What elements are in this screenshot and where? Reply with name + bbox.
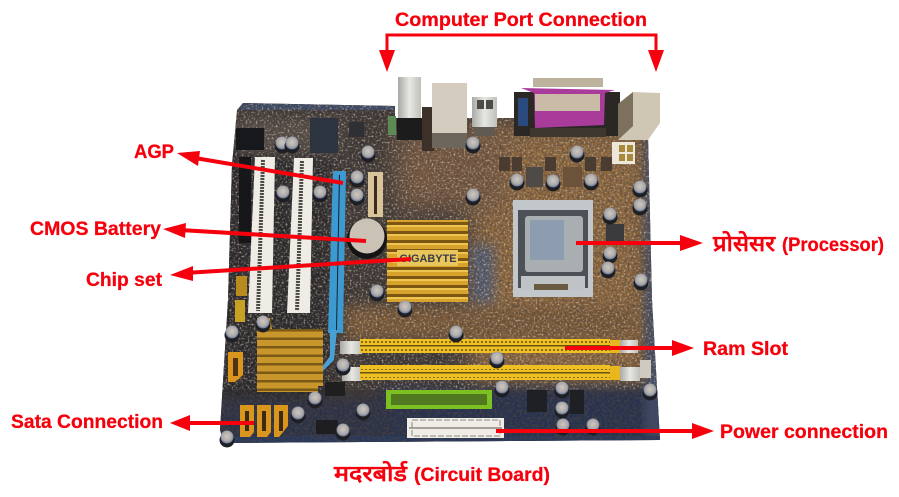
title: computer port connection: Computer Port Connection	[395, 10, 647, 31]
label: CMOS Battery: CMOS Battery	[30, 219, 161, 240]
motherboard photo	[215, 77, 665, 448]
caption: circuit board	[333, 460, 550, 486]
arrow: power connection	[496, 423, 714, 439]
chipset heatsink	[387, 220, 468, 302]
label: processor	[712, 230, 884, 256]
label: RAM slot: Ram Slot	[703, 339, 789, 360]
4-pin connector	[612, 142, 635, 164]
PCI slot 2	[287, 158, 313, 313]
ethernet port	[432, 83, 467, 148]
I/O ports	[388, 77, 660, 164]
IDE header	[239, 157, 251, 243]
lower heatsink	[257, 318, 323, 392]
label: AGP: AGP	[134, 142, 174, 163]
label: power connection: Power connection	[720, 422, 888, 443]
CPU socket and processor	[513, 200, 593, 297]
RAM slot 1	[340, 339, 638, 354]
small PCIe slot	[368, 172, 383, 217]
yellow pin headers	[235, 276, 247, 322]
fan header	[236, 128, 264, 150]
USB port	[472, 97, 497, 136]
CMOS battery	[347, 218, 387, 259]
AGP slot	[320, 171, 346, 372]
label: chip set: Chip set	[86, 270, 163, 291]
ATX power connector	[407, 418, 504, 438]
bracket arrow: computer ports	[379, 35, 664, 72]
PCI slot 1	[248, 157, 275, 313]
arrow: CMOS battery	[163, 223, 366, 241]
power port block	[618, 92, 660, 140]
arrow: RAM slot	[565, 340, 694, 356]
label: processor: प्रोसेसर	[712, 230, 776, 256]
label: processor: (Processor)	[782, 235, 884, 256]
capacitors	[220, 136, 658, 448]
RAM slot 2	[342, 360, 651, 381]
chips	[310, 118, 624, 434]
parallel port	[514, 78, 620, 137]
arrow: AGP	[177, 151, 343, 183]
circuit board base	[215, 100, 665, 448]
arrow: processor	[576, 235, 703, 251]
arrow: SATA connection	[170, 415, 254, 431]
audio jack	[388, 77, 434, 151]
green connector	[386, 390, 492, 409]
label: SATA connection: Sata Connection	[11, 412, 163, 433]
SATA connectors	[228, 352, 288, 437]
caption: circuit board: मदरबोर्ड	[333, 460, 408, 486]
chipset heatsink: GIGABYTE	[400, 253, 456, 265]
caption: circuit board: (Circuit Board)	[414, 465, 550, 486]
arrow: chip set	[170, 259, 411, 281]
